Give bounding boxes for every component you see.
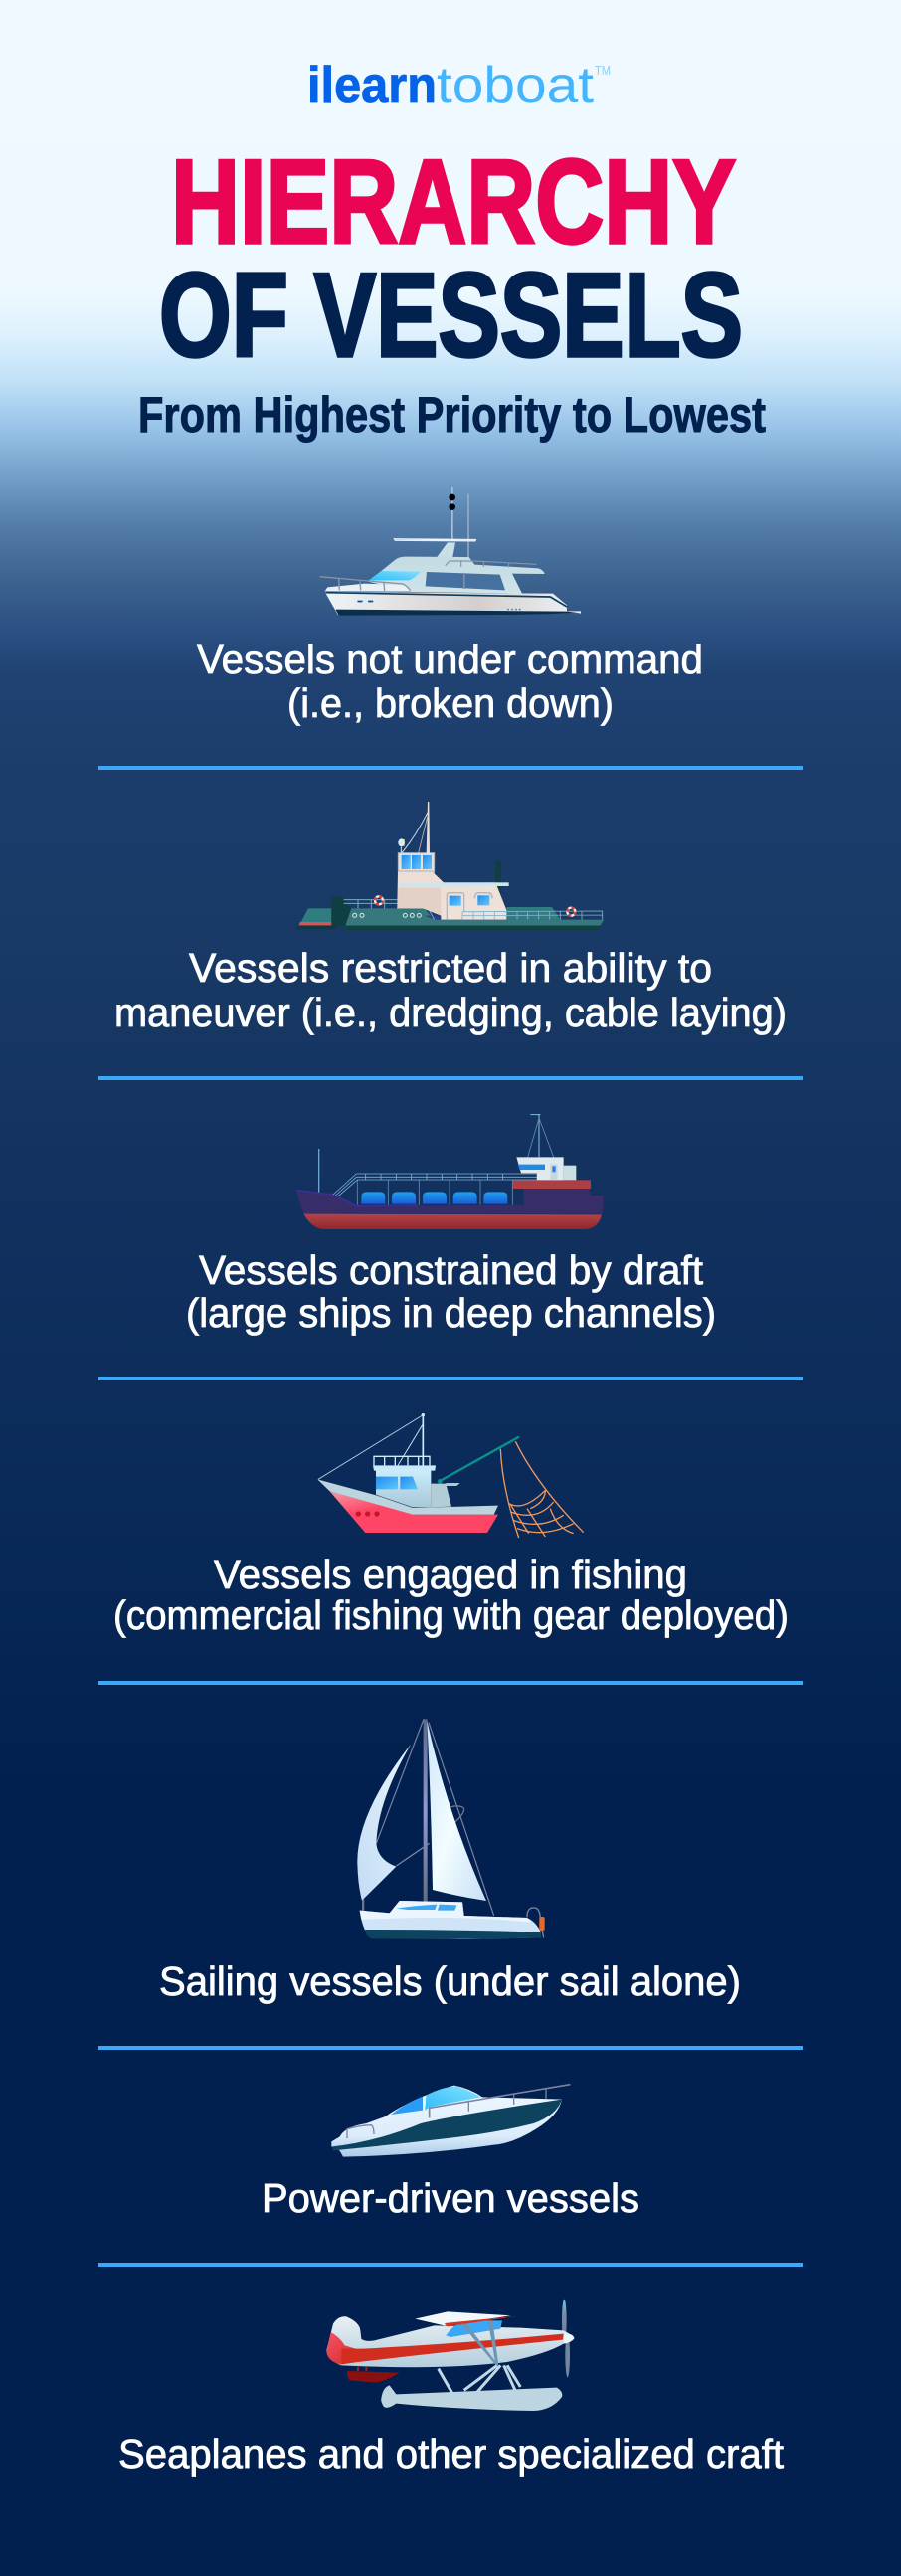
icon: fishing trawler [317,1413,584,1538]
title [159,135,743,382]
text: constrained by draft: Vessels constrained by draft [199,1247,704,1293]
icon: seaplane [326,2300,574,2411]
text: seaplanes: Seaplanes and other specialized craft [118,2431,785,2477]
text: constrained by draft [186,1247,716,1336]
text: engaged in fishing: Vessels engaged in fishing [214,1552,687,1597]
text: sailing vessels: Sailing vessels (under sail alone) [159,1958,741,2004]
text: restricted in ability to maneuver [114,945,787,1035]
icon: sailboat [357,1719,545,1939]
text: vessels not under command [197,637,703,726]
logo: toboat [437,57,595,114]
text: vessels not under command: Vessels not under command [197,637,703,682]
logo: ilearn [307,57,437,114]
text: restricted in ability to maneuver: Vessels restricted in ability to [189,945,712,991]
subtitle: From Highest Priority to Lowest [138,387,766,443]
logo [307,57,611,114]
title: HIERARCHY [171,135,736,269]
text: constrained by draft: (large ships in deep channels) [186,1290,716,1336]
icon: cargo tanker [296,1114,604,1229]
text: power-driven vessels: Power-driven vessels [262,2175,639,2221]
text: engaged in fishing: (commercial fishing with gear deployed) [113,1592,789,1638]
logo: TM [595,63,611,78]
icon: motor yacht [320,487,581,616]
title: OF VESSELS [159,249,743,382]
text: vessels not under command: (i.e., broken down) [287,680,614,726]
text: engaged in fishing [113,1552,789,1638]
text: restricted in ability to maneuver: maneuver (i.e., dredging, cable laying) [114,990,787,1035]
icon: tugboat dredger [296,802,604,930]
icon: powerboat [331,2085,570,2157]
